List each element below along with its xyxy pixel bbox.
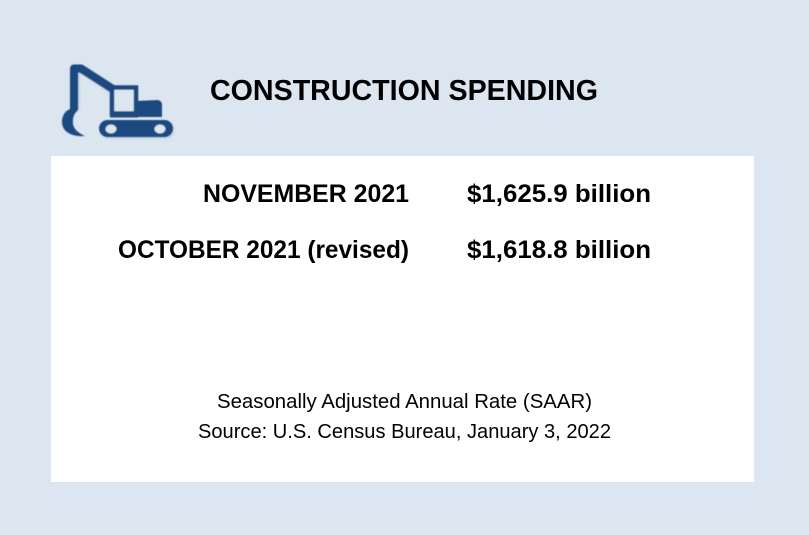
row: October 2021 label: OCTOBER 2021 (revised): [118, 236, 409, 264]
note: rate basis: Seasonally Adjusted Annual Rate (SAAR): [217, 390, 592, 413]
excavator boom and arm: [74, 68, 116, 110]
excavator cab: [112, 88, 136, 114]
excavator bucket: [62, 108, 85, 136]
row: November 2021 label: NOVEMBER 2021: [203, 180, 409, 208]
excavator track: [99, 120, 173, 137]
row: October 2021 value: $1,618.8 billion: [467, 236, 651, 264]
excavator engine body: [136, 100, 162, 117]
row: November 2021 value: $1,625.9 billion: [467, 180, 651, 208]
note: source: Source: U.S. Census Bureau, January 3, 2022: [198, 420, 611, 443]
icon: excavator: [62, 68, 174, 138]
title: CONSTRUCTION SPENDING: [210, 75, 598, 107]
panel: figures: [51, 156, 754, 482]
